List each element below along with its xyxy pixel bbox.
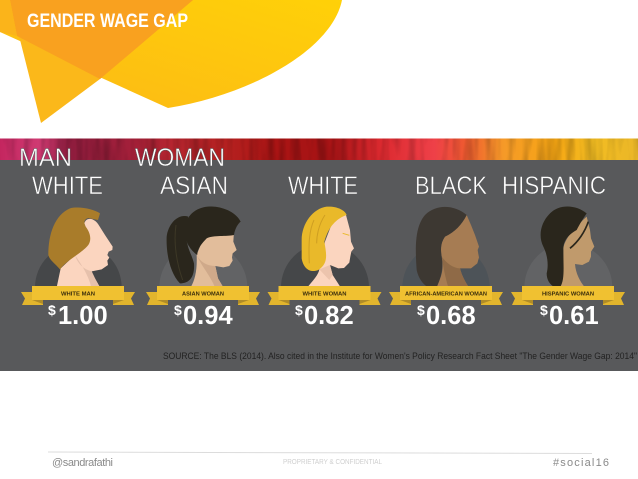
group labels: ASIAN bbox=[160, 172, 228, 200]
ribbon: hispanic woman: HISPANIC WOMAN bbox=[542, 292, 594, 298]
price: hispanic woman: 0.61 bbox=[549, 302, 599, 330]
ribbon: white man bbox=[21, 286, 135, 305]
price: asian woman: 0.94 bbox=[183, 302, 233, 330]
price: asian woman: $ bbox=[174, 302, 182, 318]
ribbon: asian woman bbox=[146, 286, 260, 305]
price: white woman: $ bbox=[295, 302, 303, 318]
price: white man: 1.00 bbox=[58, 302, 108, 330]
group labels: WHITE bbox=[288, 172, 358, 200]
price: white man: $ bbox=[48, 302, 56, 318]
price: african-american woman: $ bbox=[417, 302, 425, 318]
ribbon: asian woman: ASIAN WOMAN bbox=[182, 292, 224, 298]
ribbon: african-american woman bbox=[389, 286, 503, 305]
price: african-american woman: 0.68 bbox=[426, 302, 476, 330]
prices bbox=[48, 302, 599, 330]
portrait: hispanic woman bbox=[524, 206, 612, 287]
price: white woman: 0.82 bbox=[304, 302, 354, 330]
price: hispanic woman: $ bbox=[540, 302, 548, 318]
grey panel bbox=[0, 160, 638, 371]
footer confidentiality note: PROPRIETARY & CONFIDENTIAL bbox=[283, 459, 382, 466]
group labels bbox=[19, 144, 606, 200]
background shapes bbox=[0, 0, 342, 123]
title: GENDER WAGE GAP bbox=[27, 11, 188, 32]
ribbon: white man: WHITE MAN bbox=[61, 292, 95, 298]
woven colour strip bbox=[0, 138, 638, 160]
group labels: WOMAN bbox=[135, 144, 225, 172]
ribbon: african-american woman: AFRICAN-AMERICAN WOMAN bbox=[405, 292, 487, 298]
ribbon: white woman: WHITE WOMAN bbox=[302, 292, 346, 298]
ribbon: hispanic woman bbox=[511, 286, 625, 305]
group labels: BLACK bbox=[415, 172, 487, 200]
footer handle: @sandrafathi bbox=[52, 457, 113, 469]
group labels: WHITE bbox=[32, 172, 103, 200]
portrait: white woman bbox=[281, 207, 369, 287]
portrait: african-american woman bbox=[402, 207, 490, 287]
group labels: MAN bbox=[19, 144, 72, 172]
portrait: asian woman bbox=[159, 206, 247, 287]
footer hashtag: #social16 bbox=[553, 457, 609, 469]
ribbon: white woman bbox=[268, 286, 382, 305]
group labels: HISPANIC bbox=[502, 172, 606, 200]
portrait: white man bbox=[35, 208, 122, 287]
